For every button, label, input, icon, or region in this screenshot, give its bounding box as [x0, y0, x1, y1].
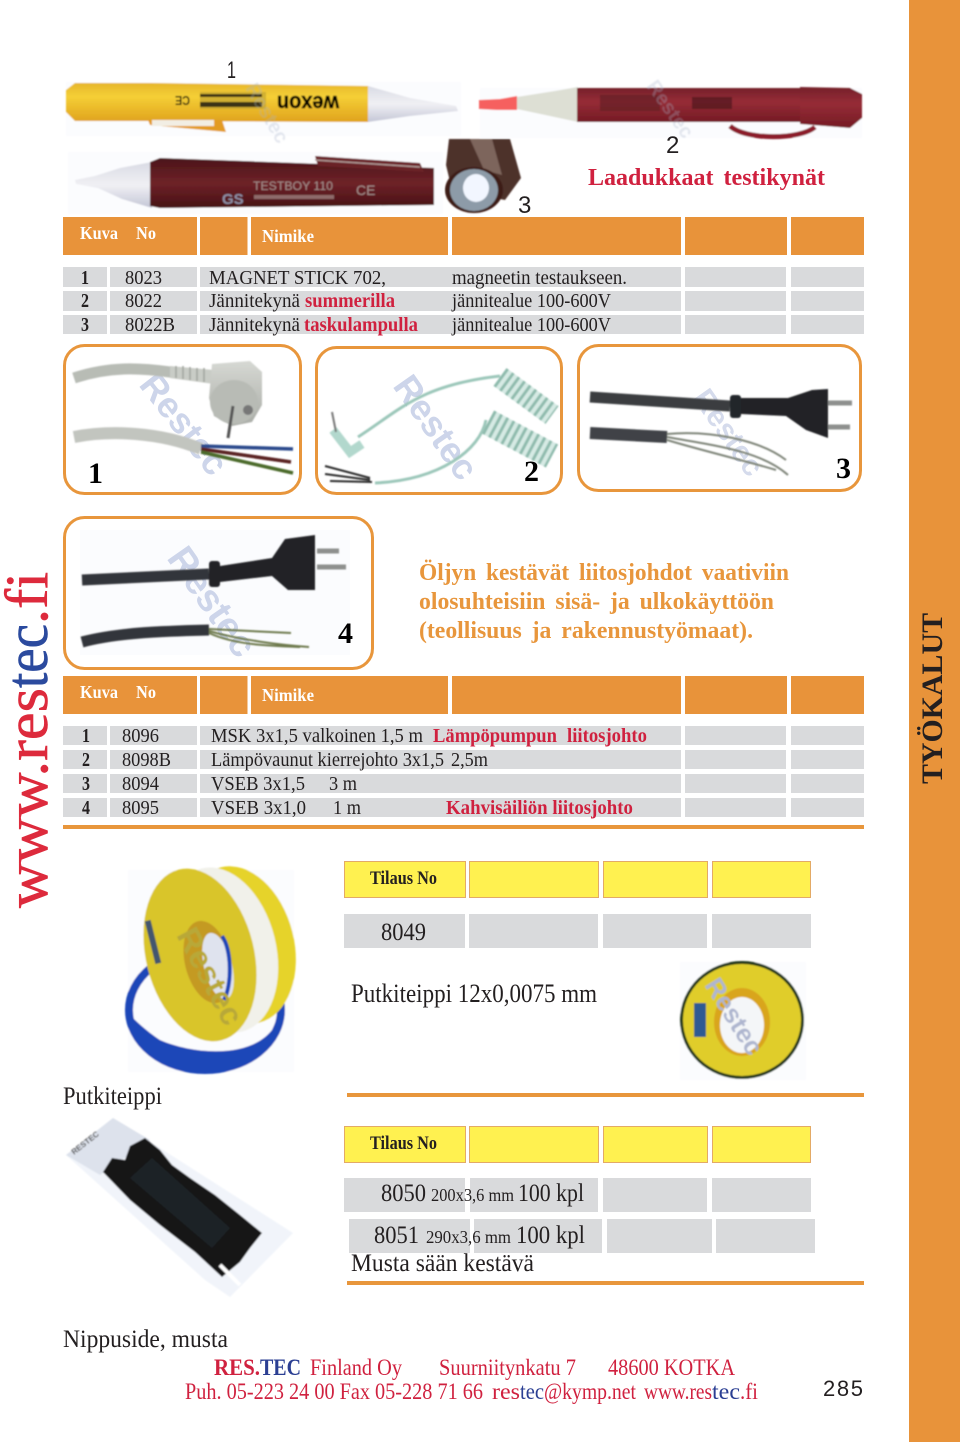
footer: company address — [185, 1355, 758, 1404]
watermark: Restec — [132, 365, 237, 483]
footer: company address: tec — [712, 1379, 740, 1404]
photo: spiral cable — [325, 376, 552, 483]
table 2 header — [63, 676, 864, 714]
pen 3: maroon: GS — [222, 191, 244, 208]
footer: company address: Puh. 05-223 24 00 Fax 05-228 71 66 — [185, 1379, 483, 1404]
photo: white angled plug cable — [74, 361, 293, 473]
product photo: tester pens — [66, 76, 862, 214]
description: oil resistant cables: Öljyn kestävät liitosjohdot vaativiin — [419, 560, 789, 586]
photo: black plug cable — [82, 535, 346, 647]
description: oil resistant cables: (teollisuus ja rakennustyömaat). — [419, 618, 753, 644]
pen 2: red — [479, 76, 862, 143]
table 2 rows — [63, 726, 864, 819]
page number: 285 — [823, 1376, 863, 1401]
table 2 header: Kuva — [80, 682, 118, 702]
panel number: 4 — [338, 617, 353, 650]
photo labels: 2 — [666, 132, 679, 159]
table 1 rows: summerilla — [305, 291, 395, 312]
product label: cable ties: Nippuside, musta — [63, 1326, 228, 1353]
description: oil resistant cables — [419, 560, 789, 644]
table 1 rows: 8022 — [125, 291, 162, 312]
photo labels: 3 — [518, 192, 531, 219]
pen 1: yellow: wexon — [277, 91, 340, 116]
table 2 rows: liitosjohto — [567, 726, 647, 747]
pen 3: flashlight — [445, 139, 521, 213]
footer: company address: www.res — [644, 1379, 712, 1404]
watermark: Restec — [686, 383, 770, 483]
table 1 header: Nimike — [262, 226, 314, 246]
table 1 header: Kuva — [80, 223, 118, 243]
table 2 rows: Lämpöpumpun — [433, 726, 557, 747]
order table: tape — [344, 862, 811, 948]
pen 3: maroon: CE — [356, 182, 375, 198]
table 2 rows: 2,5m — [451, 750, 488, 771]
table 1 rows — [63, 267, 864, 336]
footer: company address: .fi — [740, 1379, 758, 1404]
panel: cable 4 — [64, 518, 372, 668]
watermark: Restec — [385, 367, 487, 487]
footer: company address: Suurniitynkatu 7 — [439, 1355, 576, 1380]
panel number: 1 — [88, 457, 103, 490]
table 2 rows: VSEB 3x1,5 — [211, 774, 305, 795]
table 2 rows: 8094 — [122, 774, 159, 795]
product photo: cable ties bag: RESTEC — [70, 1129, 101, 1157]
table 1 rows: 2 — [81, 291, 89, 312]
table 1 rows: 3 — [81, 315, 89, 336]
footer: company address: RES. — [214, 1355, 260, 1380]
photo: black plug cable — [590, 389, 852, 475]
footer: company address: tec — [520, 1379, 544, 1404]
product photo: pipe tape roll — [126, 854, 312, 1072]
pen 1: yellow: Restec — [241, 80, 293, 147]
table 2 rows: VSEB 3x1,0 — [211, 798, 306, 819]
table 2 rows: 1 — [82, 726, 90, 747]
table 1 rows: jännitealue 100-600V — [451, 315, 611, 336]
product photo: tape roll front: Restec — [699, 972, 770, 1061]
pen 3: maroon — [75, 156, 434, 208]
pen 1: yellow: CE — [175, 93, 190, 108]
photo labels: 1 — [227, 57, 236, 84]
pen 2: red: Restec — [642, 76, 698, 143]
table 1 rows: Jännitekynä — [209, 315, 300, 336]
table 2 rows: 4 — [82, 798, 90, 819]
product photo: pipe tape roll: Restec — [170, 921, 251, 1031]
table 1 rows: magneetin testaukseen. — [452, 268, 627, 289]
footer: company address: 48600 KOTKA — [608, 1355, 735, 1380]
table 2 rows: 8095 — [122, 798, 159, 819]
side bar title: TYÖKALUT — [916, 613, 949, 784]
order table: tape: 8049 — [381, 919, 426, 946]
table 1 rows: 8023 — [125, 268, 162, 289]
panel number: 3 — [836, 452, 851, 485]
order table: cable ties: 200x3,6 mm — [431, 1185, 514, 1205]
table 2 rows: Lämpövaunut kierrejohto 3x1,5 — [211, 750, 444, 771]
order table: cable ties: 290x3,6 mm — [426, 1227, 511, 1247]
table 1 rows: Jännitekynä — [209, 291, 300, 312]
table 2 rows: 2 — [82, 750, 90, 771]
table 1 header — [63, 217, 864, 255]
table 1 rows: taskulampulla — [304, 315, 418, 336]
order table: tape: Tilaus No — [370, 868, 437, 889]
table 2 header: No — [136, 682, 156, 702]
table 2 rows: MSK 3x1,5 valkoinen 1,5 m — [211, 726, 423, 747]
panel number: 2 — [524, 455, 539, 488]
pen 3: maroon: TESTBOY 110 — [253, 179, 333, 193]
side bar — [909, 0, 960, 1442]
table 1 header: No — [136, 223, 156, 243]
watermark: Restec — [159, 539, 265, 665]
panel: cable 1 — [64, 346, 300, 494]
product photo: cable ties bag — [66, 1118, 293, 1297]
product photo: tape roll front — [680, 961, 806, 1080]
order table: cable ties: Tilaus No — [370, 1133, 437, 1154]
vertical website address — [0, 572, 60, 908]
description: tape size: Putkiteippi 12x0,0075 mm — [351, 979, 597, 1008]
heading: quality test pens: Laadukkaat testikynät — [588, 165, 825, 191]
table 2 rows: 3 m — [329, 774, 357, 795]
description: weatherproof: Musta sään kestävä — [351, 1250, 534, 1277]
product label: tape: Putkiteippi — [63, 1083, 162, 1110]
footer: company address: res — [492, 1379, 520, 1404]
pen 1: yellow — [66, 80, 458, 147]
footer: company address: Finland Oy — [310, 1355, 402, 1380]
panel: cable 2 — [316, 348, 562, 494]
order table: cable ties: 100 kpl — [516, 1222, 585, 1249]
table 1 rows: 8022B — [125, 315, 175, 336]
table 2 rows: Kahvisäiliön liitosjohto — [446, 798, 633, 819]
order table: cable ties: 8051 — [374, 1222, 419, 1249]
table 2 header: Nimike — [262, 685, 314, 705]
footer: company address: TEC — [260, 1355, 301, 1380]
table 2 rows: 8096 — [122, 726, 159, 747]
order table: cable ties: 8050 — [381, 1180, 426, 1207]
table 2 rows: 1 m — [333, 798, 361, 819]
table 2 rows: 3 — [82, 774, 90, 795]
table 1 rows: MAGNET STICK 702, — [209, 268, 386, 289]
table 1 rows: jännitealue 100-600V — [451, 291, 611, 312]
order table: cable ties: 100 kpl — [518, 1180, 584, 1207]
panel: cable 3 — [578, 346, 860, 490]
description: oil resistant cables: olosuhteisiin sisä- ja ulkokäyttöön — [419, 589, 774, 615]
table 2 rows: 8098B — [122, 750, 171, 771]
order table: cable ties — [344, 1126, 815, 1253]
footer: company address: @kymp.net — [544, 1379, 637, 1404]
table 1 rows: 1 — [81, 268, 89, 289]
photo labels — [227, 57, 679, 219]
